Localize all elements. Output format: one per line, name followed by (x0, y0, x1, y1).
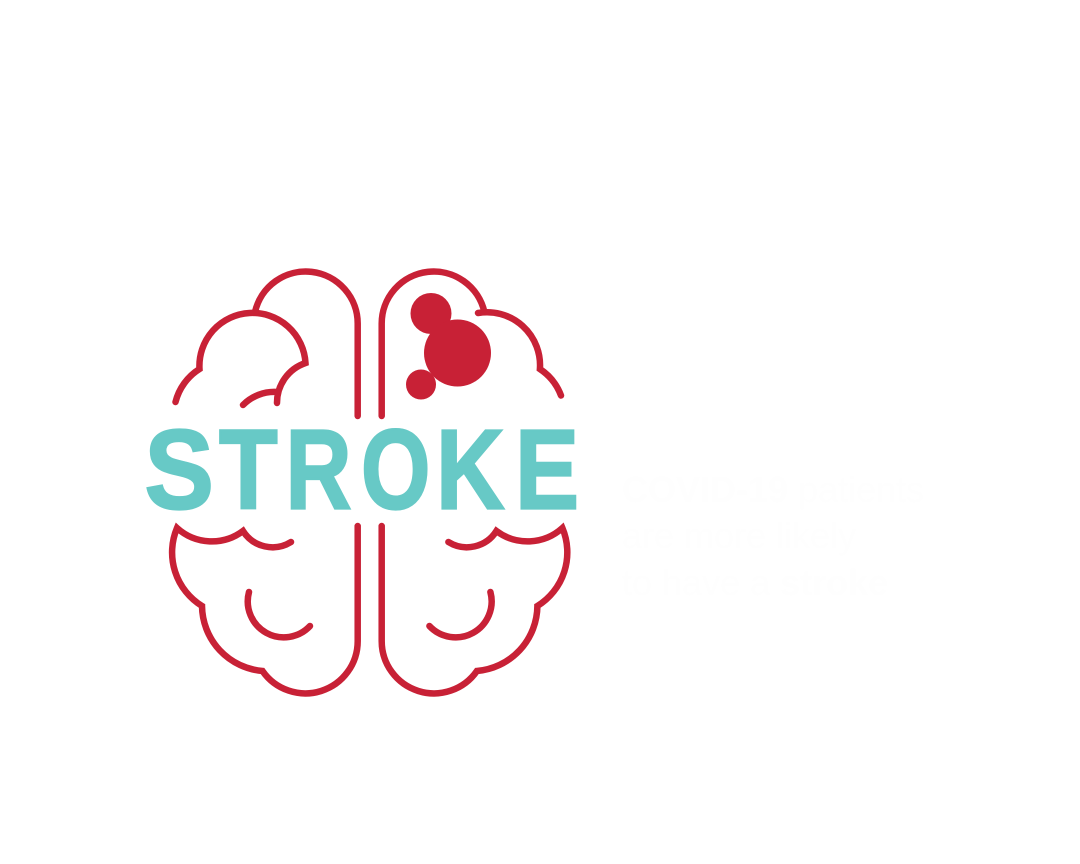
faint caption text: COVID-19 patients (622, 469, 924, 510)
title: STROKE: T (219, 407, 278, 533)
faint caption text: to have a stroke (622, 562, 888, 603)
left top lobes (176, 272, 358, 416)
left bottom lobes (172, 526, 358, 693)
title: STROKE: R (286, 406, 352, 533)
title: STROKE: K (436, 408, 505, 533)
title: STROKE: O (361, 406, 430, 533)
right bottom lobes (382, 526, 567, 693)
title: STROKE: S (144, 408, 214, 533)
title: STROKE: E (515, 407, 579, 533)
faint caption text: are more likely (622, 515, 856, 556)
right top lobes (382, 272, 561, 416)
title: STROKE (144, 406, 579, 533)
icon: blood clots (406, 293, 491, 400)
icon: brain outline (172, 272, 567, 693)
faint caption text (622, 469, 924, 603)
